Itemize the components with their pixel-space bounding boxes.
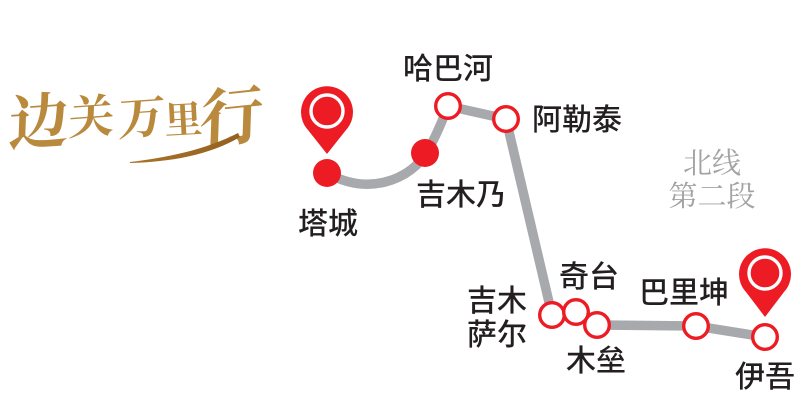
node: 木垒 (585, 313, 609, 337)
node: 奇台 (564, 300, 588, 324)
subtitle: 北线第二段: 北线 (683, 147, 741, 180)
node: 吉木萨尔 (540, 303, 564, 327)
title: calligraphy 边关万里行: 行 (199, 79, 265, 157)
label: 吉木萨尔: 吉木 (467, 285, 527, 318)
label: 伊吾: 伊吾 (735, 361, 795, 394)
node: 哈巴河 (436, 94, 460, 118)
title: calligraphy 边关万里行: 关 (68, 90, 115, 145)
label: 阿勒泰: 阿勒泰 (532, 104, 622, 137)
subtitle: 北线第二段 (668, 147, 756, 213)
title: calligraphy 边关万里行 (8, 79, 265, 163)
label: 巴里坤: 巴里坤 (639, 277, 729, 310)
title: calligraphy 边关万里行: 里 (163, 99, 203, 143)
label: 塔城: 塔城 (298, 208, 358, 241)
label: 吉木萨尔 (467, 285, 527, 352)
route line (327, 106, 765, 337)
node: 巴里坤 (684, 314, 708, 338)
label: 奇台: 奇台 (559, 261, 619, 294)
node: 吉木乃 (411, 139, 439, 167)
pin: start marker (301, 86, 353, 154)
node: 阿勒泰 (494, 107, 518, 131)
label: 吉木萨尔: 萨尔 (467, 319, 527, 352)
pin: end marker (739, 248, 791, 317)
subtitle: 北线第二段: 第二段 (668, 180, 756, 213)
node: 塔城 (313, 159, 341, 187)
label: 木垒: 木垒 (566, 345, 626, 378)
label: 吉木乃: 吉木乃 (416, 179, 506, 212)
title: calligraphy 边关万里行: 万 (118, 91, 165, 146)
label: 哈巴河: 哈巴河 (403, 53, 493, 86)
node: 伊吾 (753, 325, 777, 349)
title: calligraphy 边关万里行: 边 (8, 88, 70, 159)
